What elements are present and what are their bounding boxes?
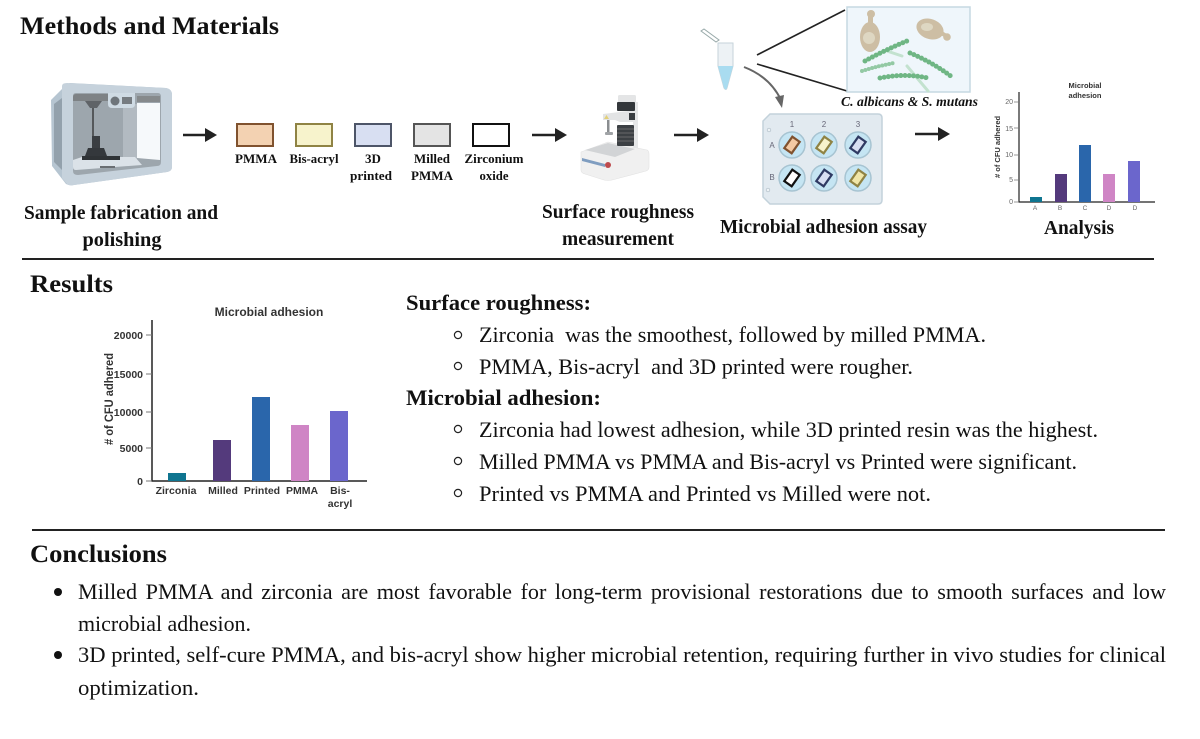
chart: analysis mini bar chart bbox=[993, 81, 1155, 212]
swatch: PMMA: PMMA bbox=[235, 151, 278, 166]
bullet: higher retention materials bbox=[54, 642, 1166, 700]
arrow: printer to samples bbox=[183, 128, 217, 142]
chart: analysis mini bar chart: 0 bbox=[1009, 199, 1013, 206]
arrow: roughness to assay bbox=[674, 128, 709, 142]
chart: microbial adhesion bar chart: Milled bbox=[208, 485, 238, 497]
chart: analysis mini bar chart: 20 bbox=[1005, 99, 1013, 106]
zoom lines: tube to inset bbox=[757, 10, 847, 91]
panel: microbes inset bbox=[847, 7, 970, 92]
label: surface roughness: Surface roughness bbox=[542, 201, 694, 223]
icon: well plate: 2 bbox=[822, 120, 827, 129]
chart: analysis mini bar chart: Microbial bbox=[1069, 81, 1101, 90]
chart: analysis mini bar chart: 10 bbox=[1005, 152, 1013, 159]
label: analysis: Analysis bbox=[1044, 217, 1114, 239]
icon: microtube bbox=[701, 29, 733, 90]
text block: surface roughness findings: Surface roughness: bbox=[406, 290, 591, 315]
swatch: Bis-acryl bbox=[290, 124, 339, 166]
swatch: Milled PMMA bbox=[411, 124, 454, 183]
label: sample fabrication: polishing bbox=[82, 229, 162, 251]
icon: well plate: B bbox=[769, 173, 775, 182]
chart: microbial adhesion bar chart: Bis- bbox=[330, 485, 350, 497]
label: sample fabrication: Sample fabrication and bbox=[24, 202, 218, 224]
arrow: assay to analysis bbox=[915, 127, 950, 141]
swatch: PMMA bbox=[235, 124, 278, 166]
pale bacterial chains bbox=[887, 51, 928, 91]
text block: surface roughness findings: PMMA, Bis-acryl and 3D printed were rougher. bbox=[479, 354, 913, 379]
panel: methods and materials bbox=[20, 7, 1155, 251]
chart: analysis mini bar chart: # of CFU adhered bbox=[993, 115, 1002, 178]
chart: analysis mini bar chart: 5 bbox=[1009, 177, 1013, 184]
icon: well plate: 1 bbox=[790, 120, 795, 129]
panel: results bbox=[30, 271, 1098, 510]
text block: surface roughness findings bbox=[406, 290, 986, 379]
bullet: favorable materials bbox=[54, 579, 1166, 636]
chart: microbial adhesion bar chart: Microbial adhesion bbox=[215, 305, 323, 319]
chart: analysis mini bar chart: adhesion bbox=[1069, 91, 1102, 100]
icon: well plate: A bbox=[769, 141, 775, 150]
swatch: Milled PMMA: PMMA bbox=[411, 168, 454, 183]
swatch: Zirconium oxide bbox=[464, 124, 524, 183]
text block: microbial adhesion findings: Milled PMMA vs PMMA and Bis-acryl vs Printed were significant. bbox=[479, 449, 1077, 474]
chart: analysis mini bar chart: B bbox=[1058, 205, 1062, 212]
chart: microbial adhesion bar chart: 0 bbox=[137, 476, 143, 488]
swatch: 3D printed bbox=[350, 124, 393, 183]
bullet: favorable materials: microbial adhesion. bbox=[78, 611, 251, 636]
icon: profilometer bbox=[581, 95, 649, 180]
chart: microbial adhesion bar chart: 20000 bbox=[114, 330, 143, 342]
swatch: Zirconium oxide: oxide bbox=[480, 168, 509, 183]
swatch: 3D printed: 3D bbox=[365, 151, 381, 166]
chart: microbial adhesion bar chart: Printed bbox=[244, 485, 280, 497]
bullet: higher retention materials: optimization. bbox=[78, 675, 199, 700]
panel: conclusions bbox=[30, 541, 1166, 700]
chart: analysis mini bar chart: C bbox=[1083, 205, 1088, 212]
arrow: samples to roughness bbox=[532, 128, 567, 142]
icon: well plate bbox=[763, 114, 882, 204]
chart: analysis mini bar chart: 15 bbox=[1005, 126, 1013, 133]
chart: microbial adhesion bar chart: 5000 bbox=[120, 443, 143, 455]
chart: microbial adhesion bar chart: # of CFU adhered bbox=[104, 353, 116, 445]
swatch: 3D printed: printed bbox=[350, 168, 393, 183]
text block: microbial adhesion findings bbox=[406, 385, 1098, 506]
text block: microbial adhesion findings: Microbial adhesion: bbox=[406, 385, 601, 410]
heading: conclusions: Conclusions bbox=[30, 541, 167, 568]
text block: microbial adhesion findings: Printed vs PMMA and Printed vs Milled were not. bbox=[479, 481, 931, 506]
chart: microbial adhesion bar chart: Zirconia bbox=[156, 485, 197, 497]
swatch: Zirconium oxide: Zirconium bbox=[464, 151, 524, 166]
icon: 3D printer bbox=[51, 83, 172, 185]
text block: surface roughness findings: Zirconia was the smoothest, followed by milled PMMA. bbox=[479, 322, 986, 347]
chart: microbial adhesion bar chart: 10000 bbox=[114, 407, 143, 419]
label: microbial adhesion assay: Microbial adhesion assay bbox=[720, 216, 927, 238]
chart: microbial adhesion bar chart: 15000 bbox=[114, 369, 143, 381]
heading: methods and materials: Methods and Materials bbox=[20, 13, 279, 40]
bullet: favorable materials: Milled PMMA and zirconia are most favorable for long-term provisional restorations due to smooth surfaces and low bbox=[78, 579, 1166, 604]
chart: microbial adhesion bar chart bbox=[104, 305, 367, 510]
icon: well plate: 3 bbox=[856, 120, 861, 129]
label: surface roughness bbox=[542, 201, 694, 250]
bullet: higher retention materials: 3D printed, self-cure PMMA, and bis-acryl show higher microbial retention, requiring further in vivo studies for clinical bbox=[78, 642, 1166, 667]
arrow: tube to plate bbox=[744, 67, 784, 108]
label: sample fabrication bbox=[24, 202, 218, 251]
chart: analysis mini bar chart: A bbox=[1033, 205, 1038, 212]
icon: C. albicans cells bbox=[860, 10, 951, 52]
icon: S. mutans chains bbox=[862, 41, 952, 78]
text block: microbial adhesion findings: Zirconia had lowest adhesion, while 3D printed resin was the highest. bbox=[479, 417, 1098, 442]
chart: microbial adhesion bar chart: PMMA bbox=[286, 485, 318, 497]
heading: results: Results bbox=[30, 271, 113, 298]
chart: analysis mini bar chart: D bbox=[1107, 205, 1112, 212]
chart: microbial adhesion bar chart: acryl bbox=[328, 498, 352, 510]
swatch: Milled PMMA: Milled bbox=[414, 151, 451, 166]
chart: analysis mini bar chart: D bbox=[1133, 205, 1138, 212]
caption: organisms: C. albicans & S. mutans bbox=[841, 95, 979, 110]
label: surface roughness: measurement bbox=[562, 228, 674, 250]
swatch: Bis-acryl: Bis-acryl bbox=[290, 151, 339, 166]
